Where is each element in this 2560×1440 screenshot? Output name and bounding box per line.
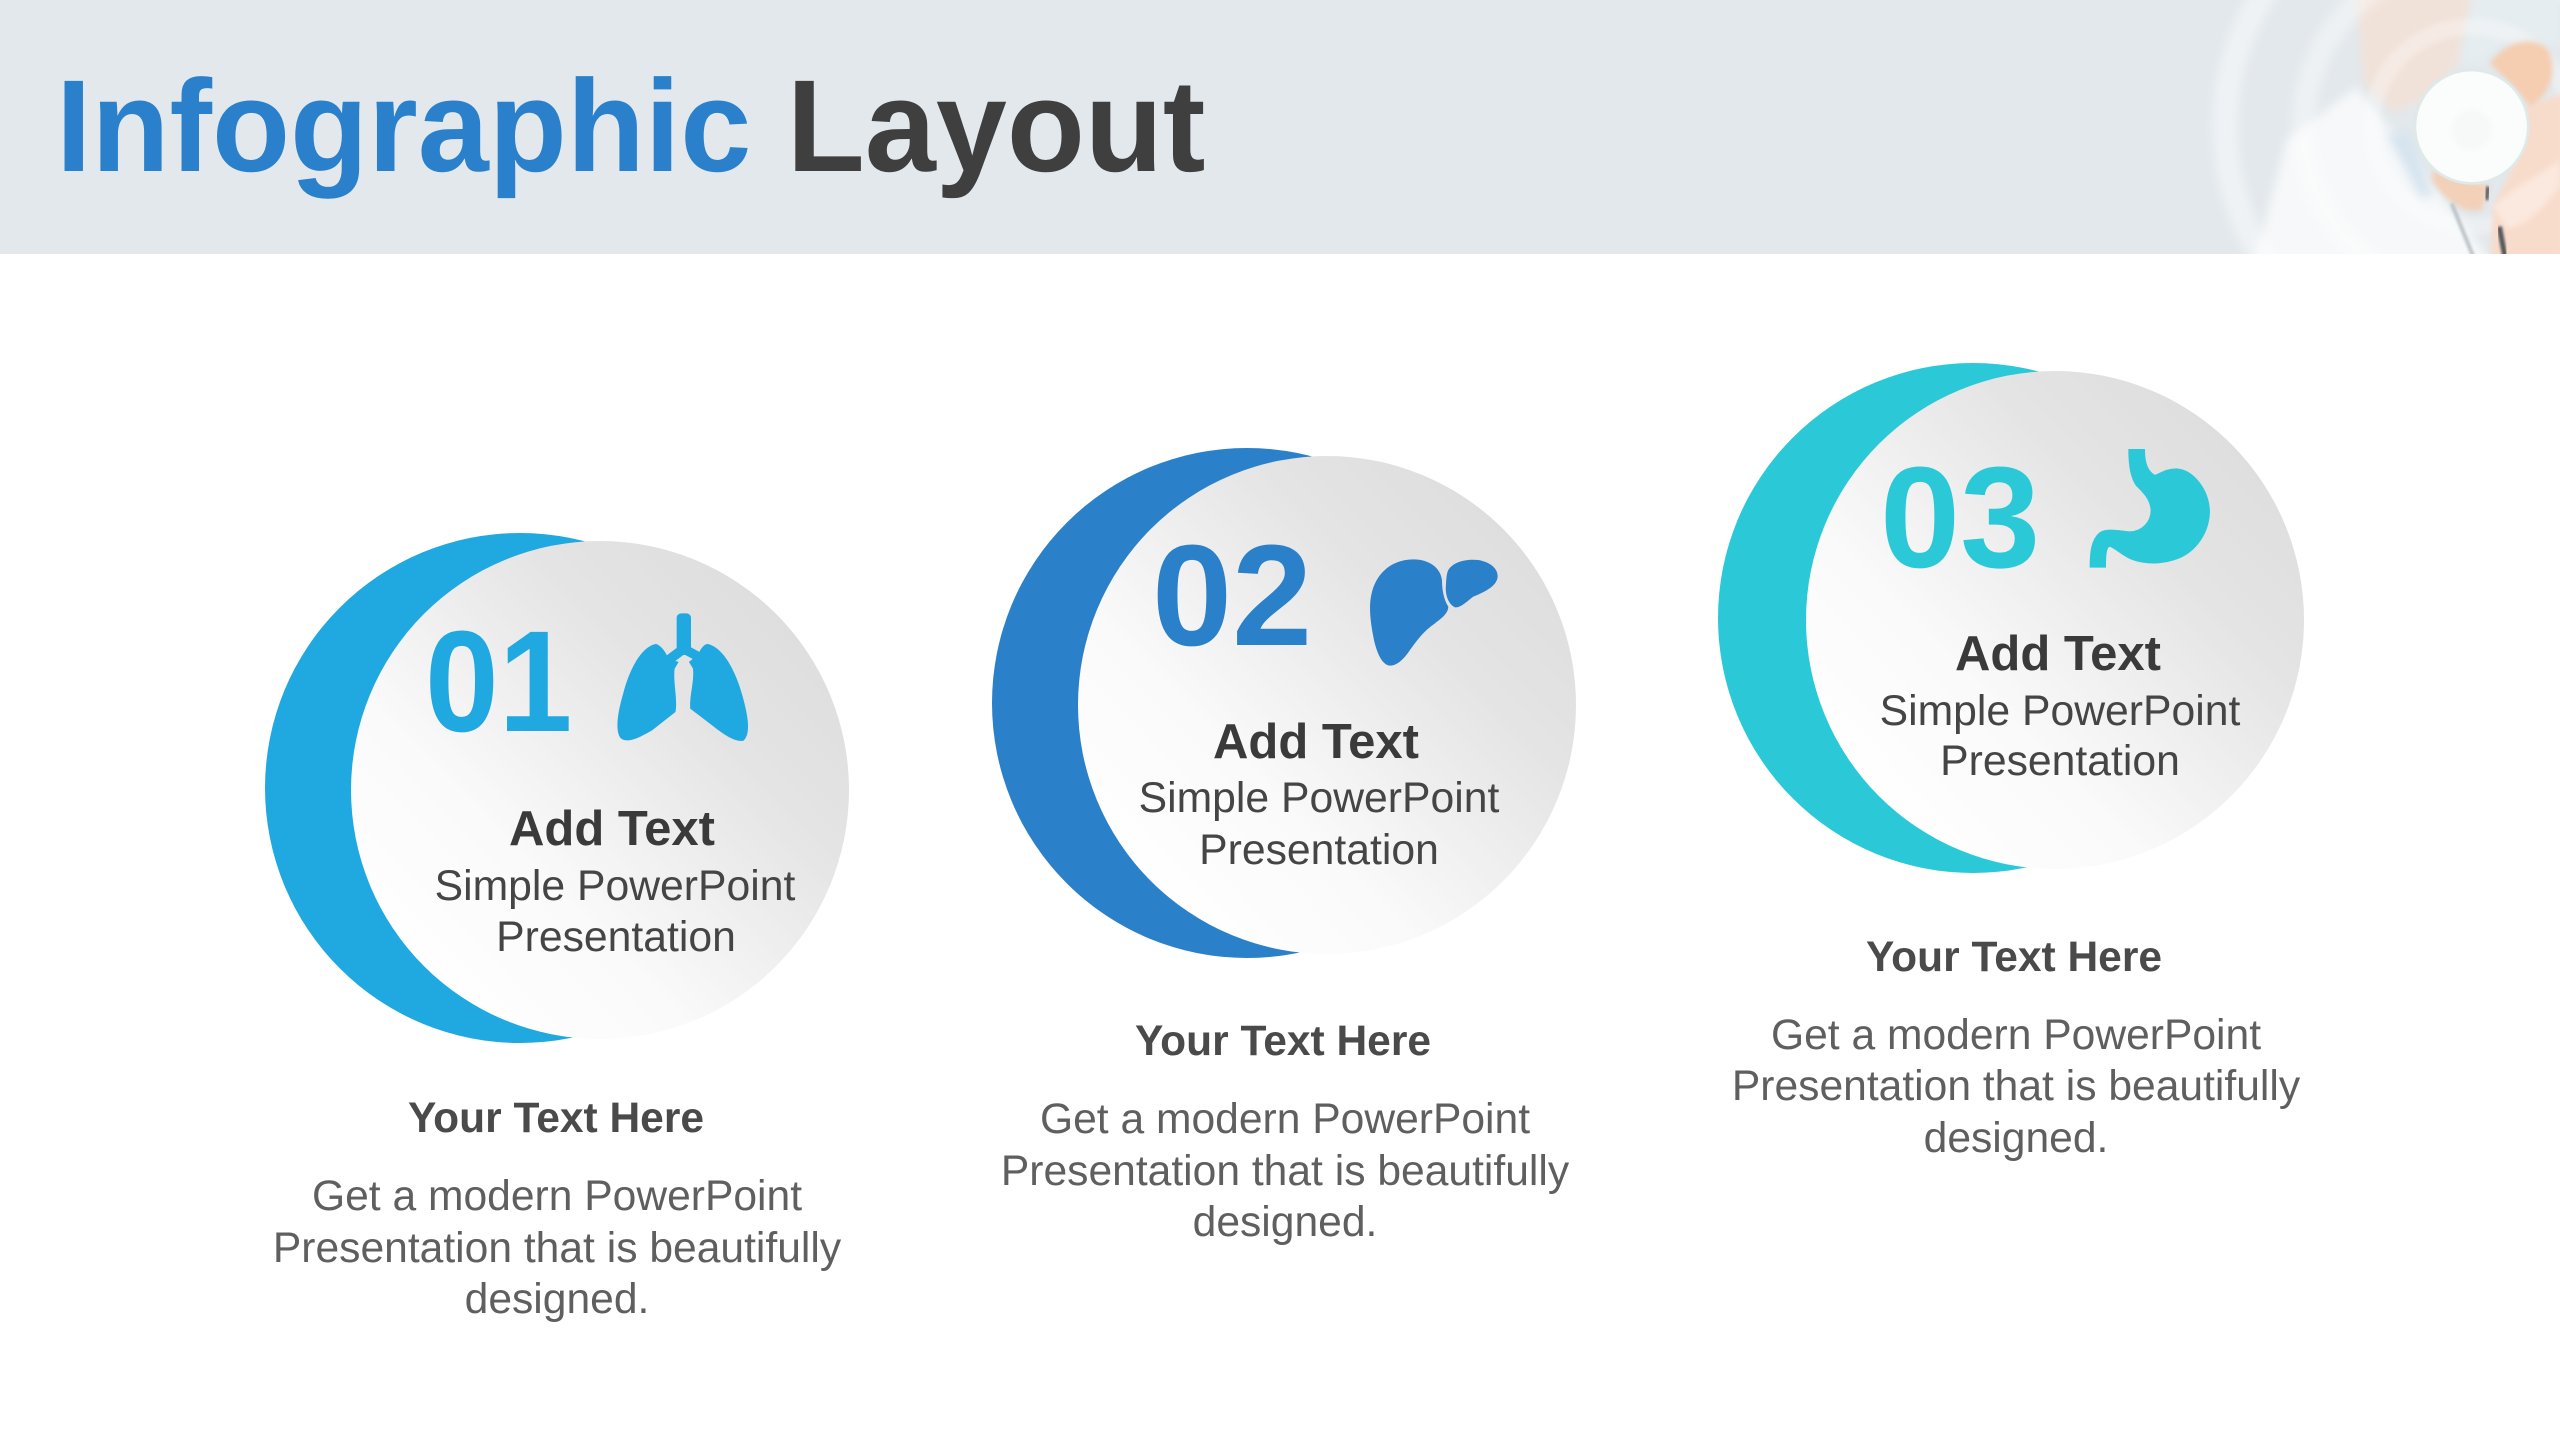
caption block 03 (1732, 934, 2301, 1162)
subtitle 01: Simple PowerPoint (435, 862, 795, 910)
caption block 02: Your Text Here (1135, 1018, 1431, 1065)
caption block 02: Presentation that is beautifully (1001, 1147, 1570, 1195)
subtitle 02: Presentation (1199, 826, 1439, 874)
icon: stomach (2091, 450, 2209, 567)
subtitle 01: Presentation (496, 913, 736, 961)
subtitle 01 (435, 862, 795, 961)
caption block 03: Get a modern PowerPoint (1771, 1011, 2261, 1059)
title: Infographic Layout (56, 54, 1205, 199)
crescent 02 (992, 448, 1502, 958)
disc 02 (1078, 456, 1576, 954)
subtitle 03 (1880, 687, 2240, 785)
panel: step 01 lungs (265, 533, 849, 1043)
caption block 03: Presentation that is beautifully (1732, 1062, 2301, 1110)
header band (0, 0, 2560, 254)
subtitle 03: Presentation (1940, 737, 2180, 785)
caption block 01: designed. (465, 1275, 649, 1323)
caption block 03: Your Text Here (1866, 934, 2162, 981)
crescent 03 (1718, 363, 2228, 873)
subtitle 02: Simple PowerPoint (1139, 774, 1499, 822)
caption block 03: designed. (1924, 1114, 2108, 1162)
photo: doctor holding stethoscope (2214, 0, 2560, 254)
subtitle 03: Simple PowerPoint (1880, 687, 2240, 735)
caption block 01: Presentation that is beautifully (273, 1224, 842, 1272)
disc 03 (1806, 371, 2304, 869)
heading: Add Text 01: Add Text (509, 802, 715, 856)
panel: step 03 stomach (1718, 363, 2304, 873)
number 02: 02 (1152, 515, 1312, 676)
panel: step 02 liver (992, 448, 1576, 958)
caption block 02: Get a modern PowerPoint (1040, 1095, 1530, 1143)
subtitle 02 (1139, 774, 1499, 874)
caption block 01: Get a modern PowerPoint (312, 1172, 802, 1220)
caption block 01: Your Text Here (408, 1095, 704, 1142)
crescent 01 (265, 533, 775, 1043)
caption block 02: designed. (1193, 1198, 1377, 1246)
icon: lungs (617, 613, 748, 741)
number 03: 03 (1880, 437, 2040, 598)
heading: Add Text 02: Add Text (1213, 715, 1419, 769)
heading: Add Text 03: Add Text (1955, 627, 2161, 681)
icon: liver (1370, 559, 1498, 666)
disc 01 (351, 541, 849, 1039)
caption block 02 (1001, 1018, 1570, 1246)
caption block 01 (273, 1095, 842, 1323)
number 01: 01 (425, 602, 572, 762)
